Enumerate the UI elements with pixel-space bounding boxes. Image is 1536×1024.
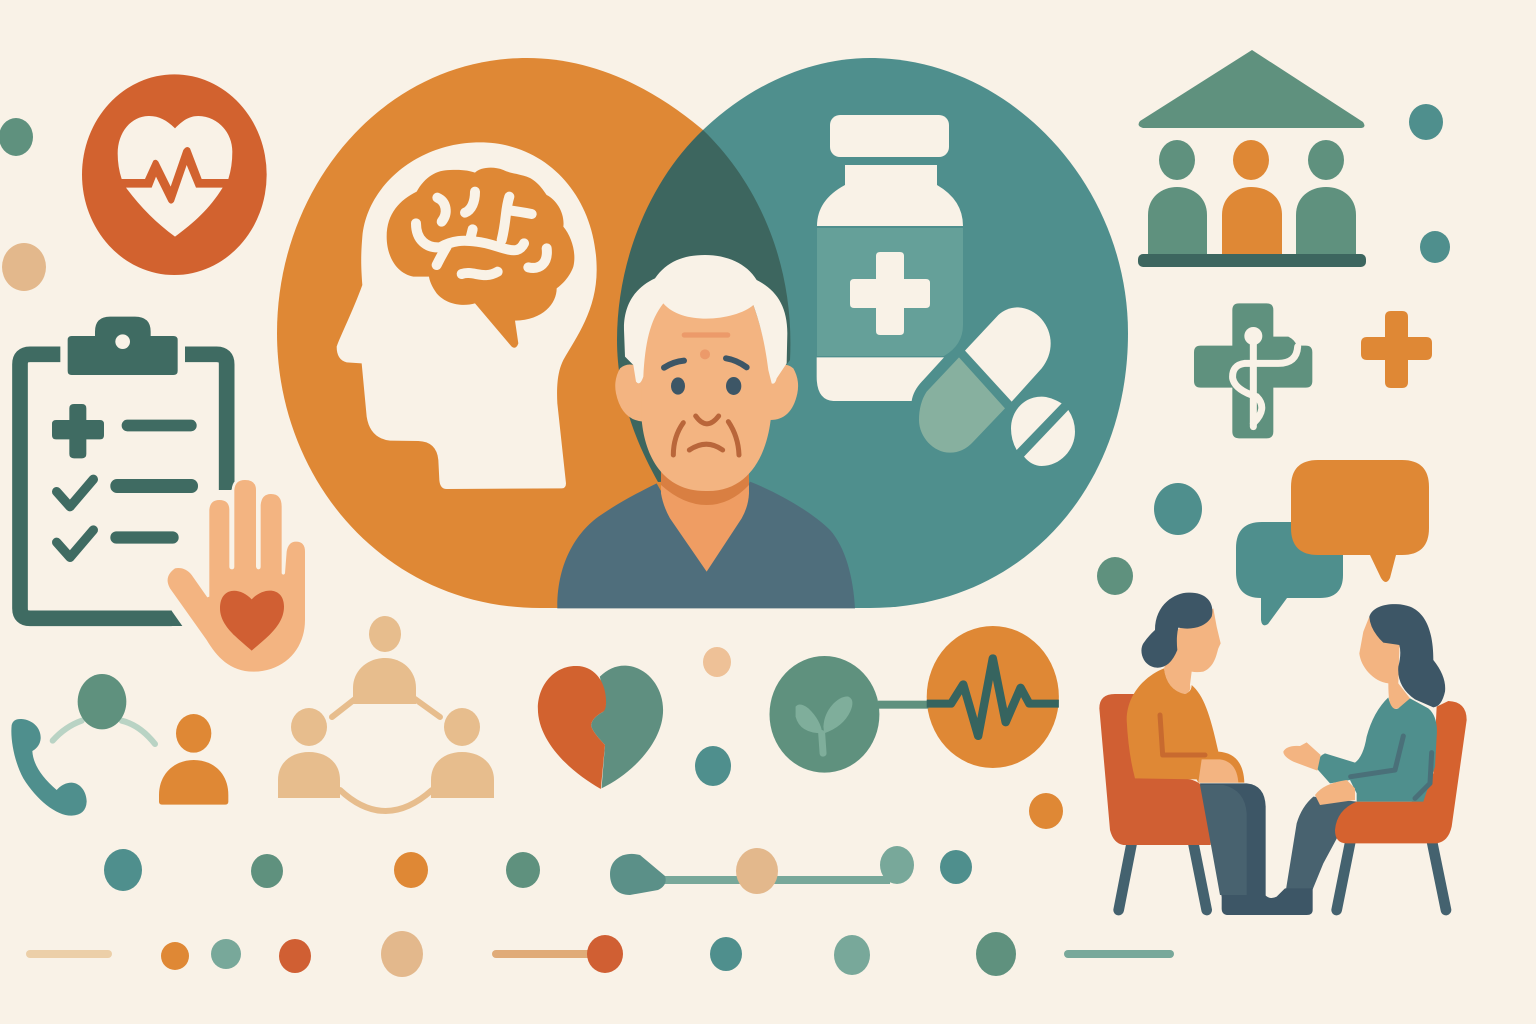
left person torso [1127, 668, 1244, 783]
decorative dot [1029, 793, 1063, 829]
contact node [78, 674, 126, 729]
elderly man [557, 255, 855, 608]
short lines row 2 [30, 950, 1170, 958]
decorative dot [1097, 557, 1133, 595]
decorative dot [703, 647, 731, 677]
caduceus [1233, 337, 1298, 427]
speech bubble: orange [1291, 460, 1429, 582]
frame end [171, 610, 182, 626]
icon: orange person [159, 714, 228, 805]
right person torso [1317, 697, 1437, 802]
left person near leg [1200, 785, 1247, 895]
icon: capsule [919, 307, 1051, 453]
left person far leg [1200, 783, 1266, 897]
right person hands [1283, 742, 1355, 805]
left person hair [1141, 593, 1212, 668]
icon: split heart [538, 666, 663, 789]
sprout [796, 697, 852, 753]
green cross [1194, 303, 1312, 438]
brain folds [416, 192, 547, 275]
bottle shoulder [817, 165, 963, 226]
left chair legs [1119, 843, 1207, 910]
hand [168, 480, 305, 672]
eyes [671, 377, 741, 395]
hair [624, 255, 787, 384]
bottle cap [830, 115, 949, 157]
icon: plant circle and pulse [770, 626, 1059, 773]
forehead mark [684, 327, 728, 343]
decorative dot [2, 243, 46, 291]
decorative dot [695, 746, 731, 786]
venn: orange circle [277, 58, 720, 608]
decorative dots row 1 [104, 849, 972, 891]
network links [332, 699, 440, 811]
clip hole [115, 334, 130, 349]
ears [615, 365, 798, 422]
shirt [557, 482, 855, 608]
neck shadow [661, 470, 749, 505]
phone handset [11, 719, 87, 816]
pulse line [927, 658, 1059, 736]
icon: support group network [278, 616, 494, 811]
speech bubble: teal [1236, 522, 1343, 625]
bottle label [817, 228, 963, 356]
head silhouette [337, 142, 597, 489]
clipboard frame [20, 354, 227, 618]
icon: medicine bottle [817, 115, 963, 401]
red oval [82, 74, 267, 275]
hand with heart [168, 480, 305, 672]
connector [878, 701, 928, 709]
icon: medical cross with caduceus [1194, 303, 1312, 438]
left person neck and face [1164, 608, 1221, 694]
forehead spot [700, 349, 710, 359]
palm heart [220, 591, 284, 651]
shoes [1222, 888, 1313, 915]
right half [591, 666, 663, 788]
hand halo [168, 480, 305, 640]
heart upper part [118, 116, 232, 187]
right chair legs [1337, 840, 1446, 910]
timeline connector [610, 846, 914, 895]
neck [661, 467, 749, 572]
left person hand [1198, 759, 1238, 782]
decorative dot [0, 118, 33, 156]
right person hair [1369, 604, 1445, 707]
icon: heart with pulse [82, 74, 267, 275]
roof [1139, 50, 1364, 128]
icon: community building [1138, 50, 1366, 267]
caduceus head [1244, 327, 1262, 345]
plant circle [770, 656, 879, 773]
icon: tablet [1011, 397, 1075, 466]
checklist lines [110, 420, 198, 544]
medical cross [52, 404, 104, 458]
left chair [1099, 694, 1211, 845]
icon: orange cross [1361, 311, 1432, 388]
bottle base [817, 357, 944, 401]
decorative dot [1409, 104, 1443, 140]
base [1138, 254, 1366, 267]
face [642, 302, 771, 491]
decorative dots row 2 [161, 931, 1016, 977]
icon: clipboard checklist [20, 317, 305, 672]
heart lower part [126, 165, 223, 237]
nose, wrinkles and mouth [673, 416, 739, 455]
brain [387, 168, 574, 348]
check marks [57, 479, 93, 557]
right person neck and face [1359, 617, 1410, 709]
decorative dot [1154, 483, 1202, 535]
clip [68, 317, 178, 375]
right person leg [1286, 797, 1357, 889]
contact arc [53, 721, 155, 744]
eyebrows [664, 358, 747, 368]
icon: phone with contact arc [11, 674, 155, 816]
left half [538, 666, 606, 789]
icon: head with brain [337, 142, 597, 489]
venn: teal circle [700, 58, 1128, 608]
left person arm line [1160, 715, 1205, 755]
bottle cross [850, 252, 930, 335]
two people in conversation [1099, 593, 1467, 915]
three people [1148, 140, 1356, 255]
right chair [1335, 701, 1467, 843]
decorative dot [587, 935, 623, 973]
orange pulse circle [927, 626, 1059, 768]
network people [278, 616, 494, 798]
decorative dot [1420, 231, 1450, 263]
right person arm lines [1351, 736, 1432, 798]
venn: dark overlap [617, 130, 790, 482]
